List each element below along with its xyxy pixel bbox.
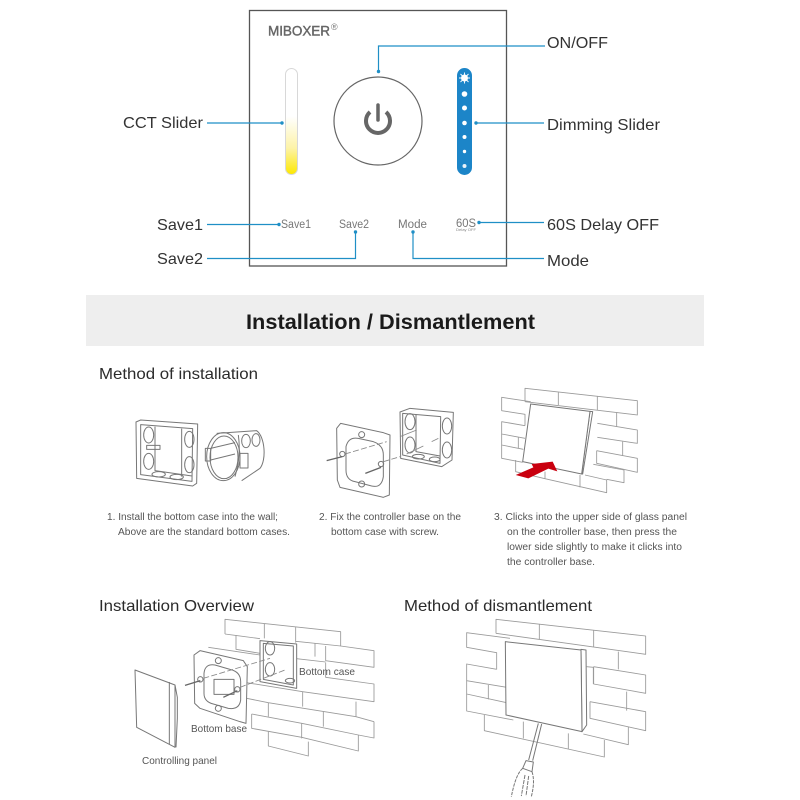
caption: step 3: lower side slightly to make it clicks into [507, 542, 682, 553]
caption: step 3: on the controller base, then press the [507, 527, 677, 538]
panel button labels: Mode [398, 219, 427, 231]
illustration: installation overview [135, 619, 374, 756]
CCT slider [286, 68, 298, 174]
callout labels: Mode [547, 253, 589, 270]
caption: step 2 [319, 512, 461, 538]
illustration: controller base with screws and box [327, 423, 400, 497]
heading: method of dismantlement: Method of dismantlement [404, 598, 593, 615]
label: bottom case: Bottom case [299, 666, 355, 678]
caption: step 1: Above are the standard bottom cases. [118, 527, 290, 538]
callout labels: Save2 [157, 251, 203, 268]
label: bottom base: Bottom base [191, 723, 247, 735]
callout labels: CCT Slider [123, 115, 204, 132]
wall panel diagram [250, 10, 506, 266]
section header band: Installation / Dismantlement [246, 311, 535, 334]
panel button labels: 60S [456, 218, 476, 230]
callout labels: ON/OFF [547, 35, 608, 52]
registered mark: ® [331, 22, 338, 32]
caption: step 2: bottom case with screw. [331, 527, 439, 538]
illustration: bottom cases [136, 420, 264, 486]
heading: installation overview: Installation Overview [99, 598, 254, 615]
callout labels [123, 35, 661, 270]
caption: step 3: the controller base. [507, 557, 595, 568]
illustration: wall box for step 2 [400, 408, 453, 467]
bottom base [194, 651, 247, 723]
caption: step 1: 1. Install the bottom case into the wall; [107, 512, 278, 523]
callout labels: 60S Delay OFF [547, 217, 659, 234]
logo: MIBOXER [268, 24, 330, 38]
panel button labels: Delay OFF [456, 227, 477, 232]
power button [334, 77, 422, 165]
callout labels: Save1 [157, 217, 203, 234]
screwdriver [529, 723, 542, 761]
label: controlling panel: Controlling panel [142, 755, 217, 767]
panel outline [250, 10, 506, 266]
panel button labels [281, 218, 477, 232]
dimming slider [457, 68, 472, 175]
bottom case [260, 641, 297, 688]
callout labels: Dimming Slider [547, 117, 661, 134]
caption: step 3 [494, 512, 687, 568]
caption: step 1 [107, 512, 290, 538]
heading: method of installation: Method of installation [99, 366, 258, 383]
controlling panel [135, 670, 175, 747]
illustration: glass panel on brick wall [502, 388, 637, 493]
red arrow [516, 462, 557, 478]
section header band [86, 295, 704, 346]
caption: step 3: 3. Clicks into the upper side of glass panel [494, 512, 687, 523]
caption: step 2: 2. Fix the controller base on the [319, 512, 461, 523]
panel button labels: Save1 [281, 219, 311, 231]
illustration: dismantlement on brick wall [467, 619, 646, 797]
panel button labels: Save2 [339, 219, 369, 231]
leader lines [207, 46, 545, 258]
